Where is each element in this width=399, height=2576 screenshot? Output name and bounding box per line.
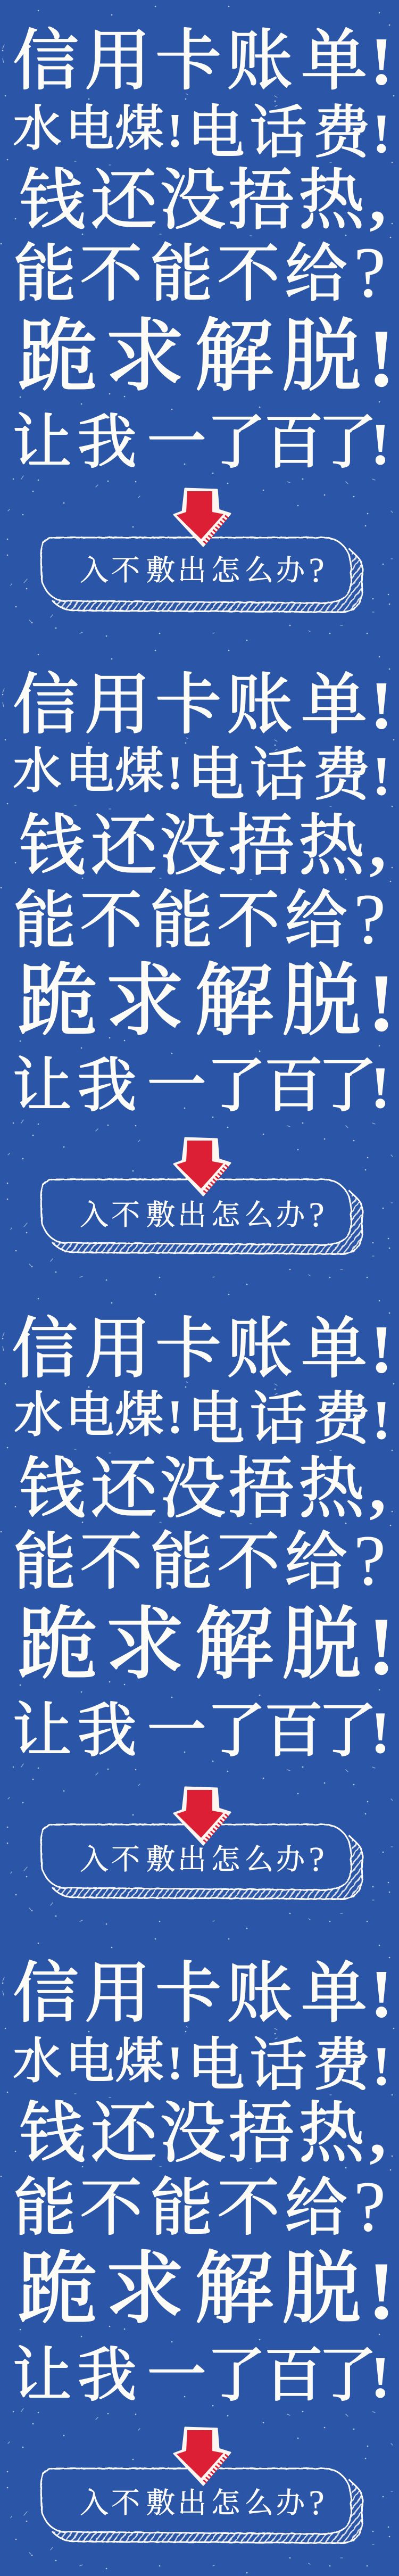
title line: 信用卡账单!: 信用卡账单 — [13, 669, 367, 742]
title line: 跪求解脱!: 跪求解脱 — [18, 957, 361, 1046]
title line: 让我一了百了!: 让我一了百了 — [12, 1698, 377, 1764]
icon: red down arrow — [174, 1138, 230, 1195]
title line: 水电煤!电话费!: ! — [167, 104, 183, 157]
button question mark: ? — [309, 1840, 325, 1879]
title line: 信用卡账单!: ! — [370, 1956, 393, 2032]
title line: 跪求解脱!: ! — [368, 2245, 395, 2336]
title line: 水电煤!电话费!: 电话费 — [187, 744, 372, 807]
button: sketched rounded box — [41, 1824, 362, 1899]
title line: 钱还没捂热,: , — [369, 2096, 386, 2169]
icon: red down arrow — [174, 2428, 230, 2485]
title line: 钱还没捂热,: 钱还没捂热 — [19, 2098, 366, 2171]
title line: 跪求解脱!: ! — [368, 957, 395, 1048]
title line: 让我一了百了!: 让我一了百了 — [12, 1053, 377, 1119]
title line: 水电煤!电话费!: ! — [167, 2037, 183, 2090]
title line: 让我一了百了!: 让我一了百了 — [12, 2343, 377, 2409]
title line: 能不能不给?: 能不能不给 — [13, 2174, 347, 2243]
button question mark: ? — [309, 551, 325, 590]
title line: 跪求解脱!: ! — [368, 312, 395, 404]
title line: 钱还没捂热,: 钱还没捂热 — [19, 1453, 366, 1526]
title line: 水电煤!电话费!: 电话费 — [187, 1388, 372, 1451]
title line: 水电煤!电话费!: 水电煤 — [13, 744, 164, 798]
title line: 水电煤!电话费!: ! — [167, 1391, 183, 1443]
title line: 能不能不给?: ? — [354, 233, 386, 312]
title line: 水电煤!电话费!: ! — [372, 1389, 390, 1451]
title line: 能不能不给?: 能不能不给 — [13, 1528, 347, 1597]
title line: 信用卡账单!: 信用卡账单 — [13, 25, 367, 98]
title line: 水电煤!电话费!: 水电煤 — [13, 2034, 164, 2088]
title line: 能不能不给?: ? — [354, 2167, 386, 2247]
title line: 让我一了百了!: ! — [370, 1055, 390, 1121]
title line: 能不能不给?: 能不能不给 — [13, 240, 347, 309]
button question mark: ? — [309, 2483, 325, 2522]
title line: 让我一了百了!: ! — [370, 1700, 390, 1766]
title line: 能不能不给?: 能不能不给 — [13, 886, 347, 956]
title line: 信用卡账单!: ! — [370, 1311, 393, 1387]
title line: 让我一了百了!: ! — [370, 411, 390, 477]
title line: 水电煤!电话费! — [13, 102, 390, 165]
title line: 钱还没捂热,: , — [369, 1451, 386, 1525]
title line: 跪求解脱!: 跪求解脱 — [18, 2245, 361, 2334]
button: sketched rounded box — [41, 2468, 362, 2543]
title line: 让我一了百了!: ! — [370, 2344, 390, 2410]
button label: 入不敷出怎么办 — [80, 1844, 306, 1876]
title line: 水电煤!电话费!: 电话费 — [187, 2034, 372, 2098]
button: sketched rounded box — [41, 1179, 362, 1254]
button: sketched rounded box — [41, 538, 362, 612]
icon: red down arrow — [174, 1787, 230, 1845]
title line: 钱还没捂热,: , — [369, 808, 386, 882]
title line: 水电煤!电话费!: ! — [372, 2035, 390, 2097]
title line: 水电煤!电话费!: ! — [167, 747, 183, 799]
title line: 水电煤!电话费!: 水电煤 — [14, 1388, 164, 1442]
button label: 入不敷出怎么办 — [80, 555, 306, 587]
title line: 水电煤!电话费!: ! — [372, 745, 390, 807]
title line: 跪求解脱!: ! — [368, 1600, 395, 1692]
button question mark: ? — [309, 1195, 325, 1234]
panel: block 4 — [1, 1939, 395, 2573]
title line: 信用卡账单!: 信用卡账单 — [13, 1958, 367, 2031]
title line: 水电煤!电话费!: 水电煤 — [13, 102, 164, 156]
title line: 能不能不给?: ? — [354, 880, 386, 959]
title line: 钱还没捂热,: 钱还没捂热 — [19, 810, 366, 884]
button label: 入不敷出怎么办 — [80, 1199, 306, 1231]
title line: 跪求解脱!: 跪求解脱 — [18, 1601, 361, 1689]
title line: 水电煤!电话费! — [13, 744, 390, 807]
panel: block 2 — [1, 650, 395, 1284]
title line: 能不能不给?: ? — [354, 1521, 386, 1600]
title line: 水电煤!电话费! — [13, 2034, 390, 2098]
title line: 信用卡账单!: ! — [370, 23, 393, 99]
title line: 水电煤!电话费!: 电话费 — [187, 102, 372, 165]
title line: 水电煤!电话费! — [14, 1388, 390, 1451]
title line: 水电煤!电话费!: ! — [372, 102, 390, 164]
button label: 入不敷出怎么办 — [80, 2487, 306, 2519]
panel: block 1 — [1, 6, 395, 640]
title line: 钱还没捂热,: , — [369, 163, 386, 236]
title line: 信用卡账单!: 信用卡账单 — [12, 1313, 367, 1386]
panel: block 3 — [1, 1294, 395, 1928]
title line: 让我一了百了!: 让我一了百了 — [12, 410, 377, 476]
title line: 钱还没捂热,: 钱还没捂热 — [19, 164, 366, 238]
title line: 信用卡账单!: ! — [370, 667, 393, 743]
icon: red down arrow — [174, 489, 230, 546]
title line: 跪求解脱!: 跪求解脱 — [18, 313, 361, 401]
